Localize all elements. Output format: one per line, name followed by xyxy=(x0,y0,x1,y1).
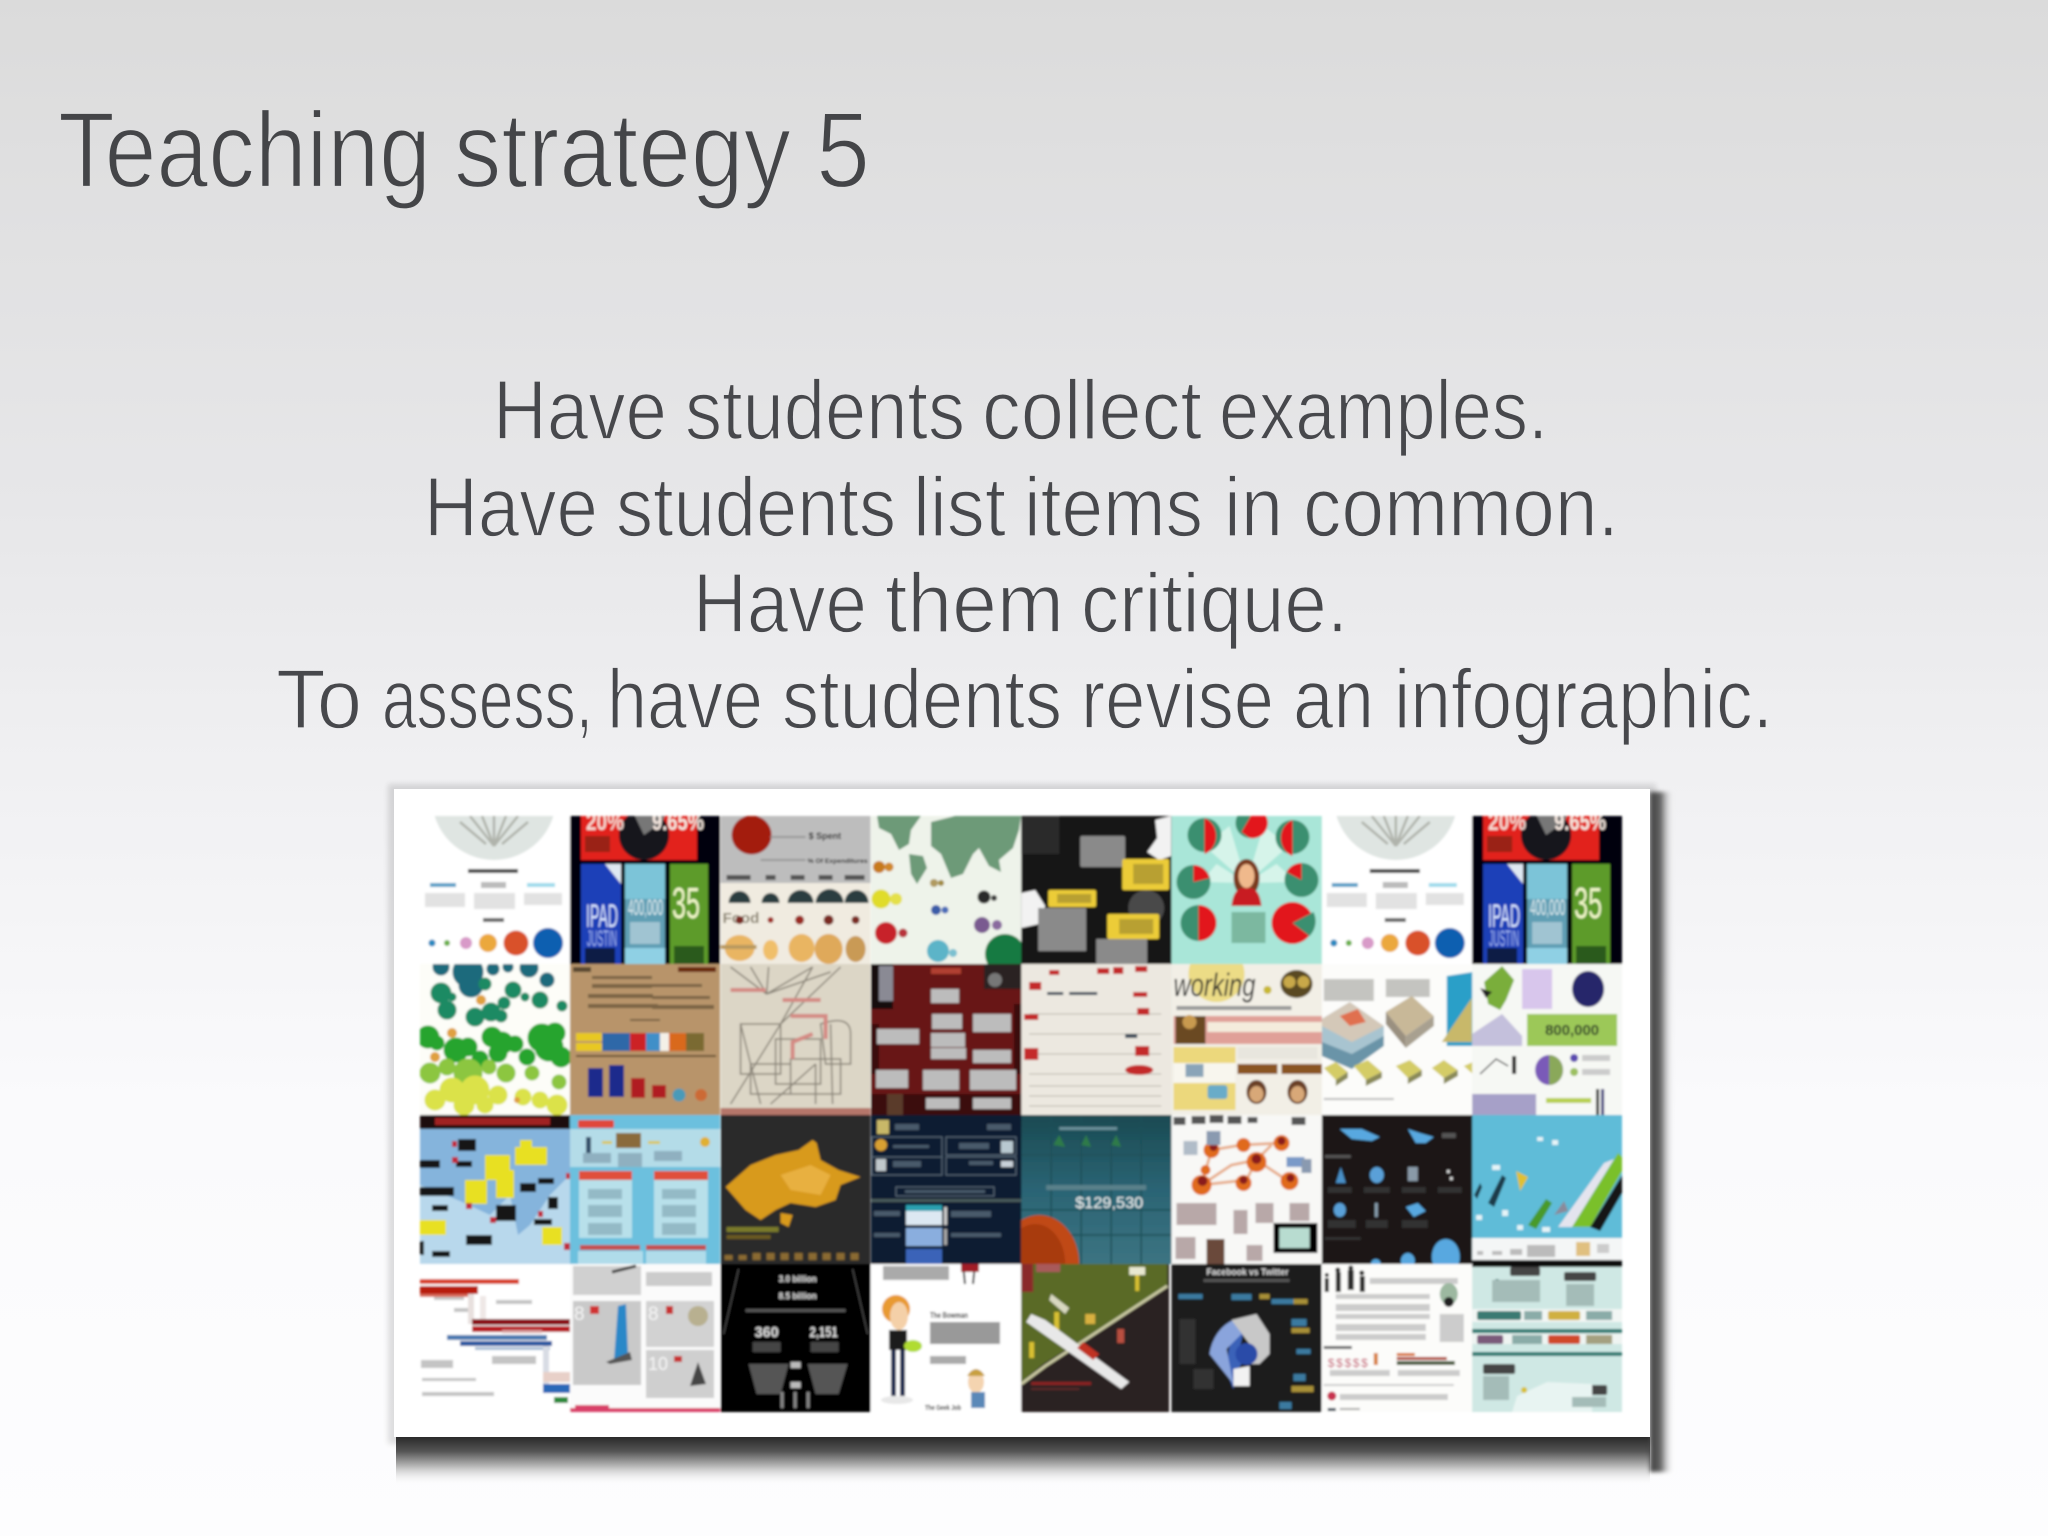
thumbnail: purple and green stats xyxy=(1470,962,1624,1116)
text block: strategy steps: list xyxy=(913,460,1006,554)
text block: strategy steps: have xyxy=(607,652,763,746)
thumbnail: Facebook vs Twitter xyxy=(1170,1262,1323,1414)
thumbnail: working infographic: working xyxy=(1174,967,1256,1003)
thumbnail: blue world map with callouts xyxy=(418,1113,572,1265)
thumbnail: spending circles: % Of Expenditures xyxy=(808,859,868,865)
thumbnail: black billion statistics: 3.0 billion xyxy=(779,1274,817,1284)
thumbnail: green bubble chart xyxy=(418,962,572,1118)
thumbnail: social circles xyxy=(424,814,572,966)
thumbnail: red and blue stats: 20% xyxy=(586,809,624,836)
thumbnail: teal grid with salary xyxy=(1018,1114,1173,1266)
panel: infographic collage xyxy=(388,736,1674,1485)
thumbnail: world map circles xyxy=(870,814,1024,966)
thumbnail: cyan isometric ship xyxy=(1470,1113,1624,1266)
thumbnail: people and money text: $$$$$ xyxy=(1328,1356,1368,1370)
thumbnail: dark red flow chart xyxy=(869,962,1023,1117)
text block: strategy steps: examples. xyxy=(1219,363,1548,457)
thumbnail: black billion statistics xyxy=(719,1262,872,1414)
thumbnail: isometric land blocks xyxy=(1320,970,1474,1118)
title: 5 xyxy=(816,89,870,210)
thumbnail: red and blue stats repeat: JUSTIN xyxy=(1489,926,1519,951)
thumbnail: dark with orange US map xyxy=(719,1113,872,1266)
text block: strategy steps: assess, xyxy=(382,652,593,746)
thumbnail: sky blue comparison xyxy=(568,1114,722,1266)
thumbnail: orange network xyxy=(1169,1114,1324,1266)
thumbnail: black with blue shapes xyxy=(1320,1114,1474,1266)
thumbnail: grey panels with blue tower: 8 xyxy=(574,1304,585,1325)
title: Teaching xyxy=(58,89,431,210)
thumbnail: social circles repeat xyxy=(1320,815,1474,964)
thumbnail: red and blue stats repeat xyxy=(1470,809,1624,966)
text block: strategy steps: Have xyxy=(693,556,867,650)
panel shadow xyxy=(388,784,1674,1485)
title: strategy xyxy=(454,89,791,210)
thumbnail: red and blue stats repeat: 9.65% xyxy=(1554,809,1606,836)
text block: strategy steps: revise xyxy=(1081,652,1274,746)
thumbnail: spending circles: Food xyxy=(723,910,759,927)
thumbnail: red and blue stats repeat: IPAD xyxy=(1488,898,1520,934)
thumbnail: black billion statistics: 2,151 xyxy=(810,1324,838,1341)
thumbnail: purple and green stats: 800,000 xyxy=(1545,1022,1599,1039)
thumbnail: black billion statistics: 360 xyxy=(755,1324,779,1341)
thumbnail: isometric green and road xyxy=(1020,1262,1171,1414)
thumbnail: grey panels with blue tower: 8 xyxy=(648,1304,659,1325)
text block: strategy steps: an xyxy=(1293,652,1374,746)
thumbnail: grey panels with blue tower: 10 xyxy=(648,1354,668,1374)
text block: strategy steps xyxy=(276,363,1773,746)
thumbnail: red and blue stats: 35 xyxy=(672,879,700,928)
thumbnail: red and blue stats: JUSTIN xyxy=(587,926,617,951)
text block: strategy steps: critique. xyxy=(1081,556,1348,650)
text block: strategy steps: them xyxy=(885,556,1064,650)
thumbnail: teal grid with salary: $129,530 xyxy=(1075,1195,1143,1212)
thumbnail: red and blue stats repeat: 400,000 xyxy=(1530,895,1565,920)
text block: strategy steps: common. xyxy=(1303,460,1619,554)
thumbnail: grey panels with blue tower xyxy=(568,1262,722,1414)
text block: strategy steps: collect xyxy=(982,363,1202,457)
text block: strategy steps: To xyxy=(276,652,362,746)
thumbnail: pale mint pills xyxy=(1470,1262,1624,1413)
thumbnail: working infographic xyxy=(1172,962,1324,1116)
thumbnail: tan bar charts xyxy=(568,962,722,1116)
text block: strategy steps: students xyxy=(616,460,896,554)
thumbnail: cartoon characters xyxy=(868,1262,1024,1414)
thumbnail: black billion statistics: 8.5 billion xyxy=(779,1291,817,1301)
thumbnail: people and money text xyxy=(1320,1262,1474,1414)
thumbnail: spending circles xyxy=(718,814,872,966)
text block: strategy steps: Have xyxy=(493,363,667,457)
white card xyxy=(394,789,1650,1437)
text block: strategy steps: in xyxy=(1224,460,1283,554)
thumbnail: navy interface panels xyxy=(869,1113,1024,1266)
thumbnail: red and blue stats: 400,000 xyxy=(628,895,663,920)
text block: strategy steps: Have xyxy=(424,460,598,554)
text block: strategy steps: items xyxy=(1024,460,1203,554)
thumbnail: red and blue stats: IPAD xyxy=(586,898,618,934)
thumbnail: animal line chart xyxy=(1019,962,1172,1118)
title xyxy=(58,89,870,210)
text block: strategy steps: students xyxy=(685,363,965,457)
thumbnail: red and blue stats repeat: 20% xyxy=(1488,809,1526,836)
thumbnail: black with yellow labels xyxy=(1019,814,1173,966)
text block: strategy steps: students xyxy=(782,652,1062,746)
thumbnail grid xyxy=(419,736,1622,1412)
thumbnail: cartoon characters: The Bowman xyxy=(930,1311,968,1320)
thumbnail: red and blue stats xyxy=(568,809,722,966)
thumbnail: beige network diagram xyxy=(719,963,873,1116)
thumbnail: red and blue staircase xyxy=(418,1278,572,1413)
text block: strategy steps: infographic. xyxy=(1394,652,1773,746)
thumbnail: cartoon characters: The Geek Job xyxy=(925,1405,961,1412)
thumbnail: mint pie charts with woman xyxy=(1169,814,1323,966)
thumbnail: spending circles: $ Spent xyxy=(809,831,841,841)
thumbnail: red and blue stats repeat: 35 xyxy=(1574,879,1602,928)
thumbnail: Facebook vs Twitter: Facebook vs Twitter xyxy=(1206,1267,1289,1277)
thumbnail: red and blue stats: 9.65% xyxy=(652,809,704,836)
